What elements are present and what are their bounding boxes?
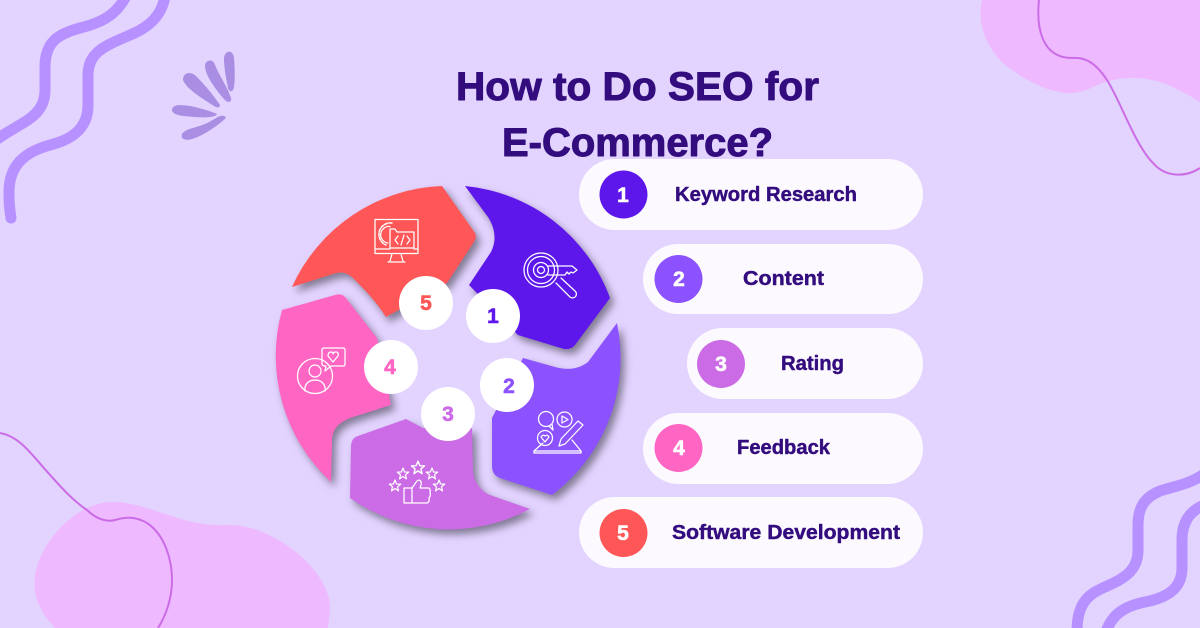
segment 2: content	[492, 323, 621, 495]
number badge 3: 3	[442, 403, 454, 426]
segment 1: keyword research	[465, 186, 610, 349]
segment 3: rating	[350, 419, 530, 529]
list item 1: keyword research	[579, 159, 923, 230]
decorative blob: top right	[981, 0, 1200, 102]
decorative curve: bottom left	[0, 433, 172, 628]
title	[456, 65, 819, 165]
number badge 5	[399, 276, 453, 330]
segment 5: software development	[292, 186, 476, 317]
segment 4: feedback	[276, 294, 391, 482]
list item 5: software development: 5	[617, 522, 629, 545]
list item 3: rating: Rating	[781, 353, 844, 375]
number badge 5: 5	[420, 292, 432, 315]
decorative curve: top right	[1038, 0, 1200, 175]
number badge 3	[421, 387, 475, 441]
list item 1: keyword research: Keyword Research	[675, 184, 857, 206]
icon: monitor with code	[375, 220, 418, 262]
icon: user with heart bubble	[298, 348, 345, 394]
number badge 2	[480, 358, 534, 412]
list item 4: feedback: Feedback	[737, 437, 831, 459]
list item 1: keyword research: 1	[617, 184, 629, 207]
decorative waves: bottom right	[1077, 474, 1200, 628]
icon: stars and thumbs up	[389, 461, 445, 503]
list item 3: rating: 3	[715, 353, 727, 376]
number badge 1	[466, 289, 520, 343]
list item 5: software development: Software Development	[672, 522, 900, 544]
list item 5: software development	[579, 497, 923, 568]
decorative waves: top left	[0, 0, 165, 218]
icon: content creation	[534, 412, 583, 453]
icon: key in magnifier	[524, 253, 577, 298]
list item 2: content	[643, 244, 923, 314]
title: How to Do SEO for	[456, 65, 819, 109]
list item 3: rating	[687, 328, 923, 399]
list item 4: feedback	[643, 413, 923, 484]
decorative burst icon	[172, 52, 235, 140]
number badge 4: 4	[384, 356, 396, 379]
list item 4: feedback: 4	[673, 437, 685, 460]
number badge 4	[364, 340, 418, 394]
decorative blob: bottom left	[35, 502, 330, 628]
list item 2: content: 2	[673, 268, 685, 291]
cycle diagram	[276, 186, 621, 529]
number badge 2: 2	[503, 375, 515, 398]
title: E-Commerce?	[502, 121, 773, 165]
number badge 1: 1	[487, 305, 499, 328]
list item 2: content: Content	[743, 268, 824, 290]
